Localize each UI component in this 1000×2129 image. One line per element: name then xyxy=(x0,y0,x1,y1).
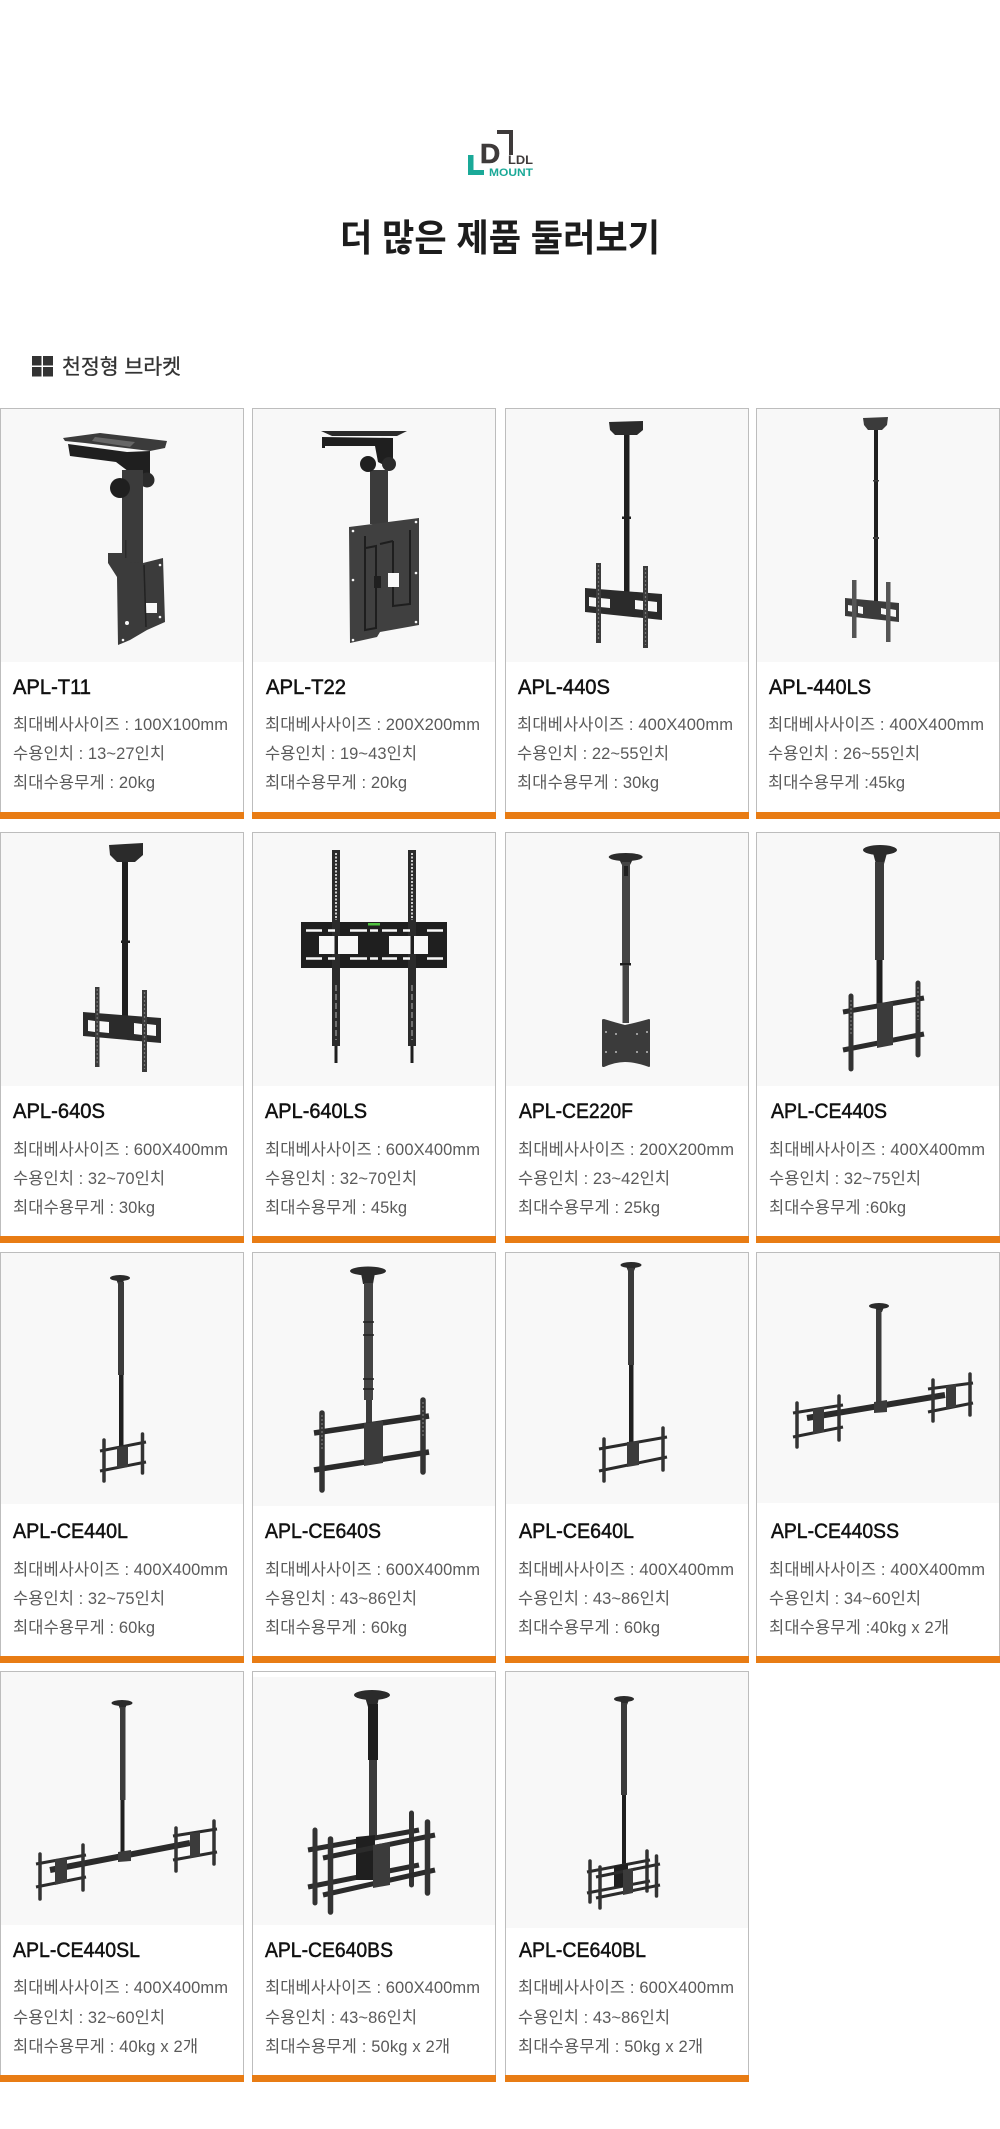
specs: 최대수용무게 : 20kg xyxy=(265,773,407,792)
panel: APL-CE640L xyxy=(505,1252,749,1663)
specs: 최대베사사이즈 : 400X400mm xyxy=(769,1140,985,1159)
specs xyxy=(13,715,228,792)
model name: APL-440LS xyxy=(769,676,871,699)
specs: 수용인치 : 34~60인치 xyxy=(769,1589,921,1608)
specs: 최대수용무게 : 20kg xyxy=(13,773,155,792)
specs: 수용인치 : 32~60인치 xyxy=(13,2008,165,2027)
specs: 최대베사사이즈 : 400X400mm xyxy=(13,1560,228,1579)
model name: APL-CE220F xyxy=(519,1100,633,1123)
specs: 최대수용무게 : 50kg x 2개 xyxy=(265,2037,450,2056)
model name: APL-CE640BS xyxy=(265,1939,393,1962)
specs: 수용인치 : 43~86인치 xyxy=(518,1589,670,1608)
specs xyxy=(768,715,984,792)
specs xyxy=(265,1560,480,1637)
bracket image: APL-T22 xyxy=(321,431,419,643)
specs: 수용인치 : 22~55인치 xyxy=(517,744,669,763)
specs: 최대베사사이즈 : 400X400mm xyxy=(13,1978,228,1997)
specs xyxy=(769,1140,985,1217)
specs: 수용인치 : 23~42인치 xyxy=(518,1169,670,1188)
model name: APL-T22 xyxy=(266,676,346,699)
bracket image: APL-640S xyxy=(83,843,161,1072)
panel: APL-CE640BL xyxy=(505,1672,749,2082)
bracket image: APL-CE440S xyxy=(843,845,924,1069)
model name: APL-640LS xyxy=(265,1100,367,1123)
specs: 수용인치 : 26~55인치 xyxy=(768,744,920,763)
specs: 최대수용무게 : 30kg xyxy=(13,1198,155,1217)
specs: 최대베사사이즈 : 400X400mm xyxy=(769,1560,985,1579)
specs: 최대수용무게 : 60kg xyxy=(265,1618,407,1637)
specs: 수용인치 : 32~70인치 xyxy=(265,1169,417,1188)
panel: APL-CE220F xyxy=(505,832,749,1243)
model name: APL-CE640S xyxy=(265,1520,381,1543)
panel: APL-CE640BS xyxy=(252,1672,496,2082)
bracket image: APL-CE440SS xyxy=(793,1303,973,1447)
model name: APL-CE440SS xyxy=(771,1520,899,1543)
specs: 최대베사사이즈 : 600X400mm xyxy=(265,1978,480,1997)
specs xyxy=(518,1560,734,1637)
specs: 최대수용무게 :40kg x 2개 xyxy=(769,1618,949,1637)
model name: APL-CE640BL xyxy=(519,1939,646,1962)
specs: 최대베사사이즈 : 100X100mm xyxy=(13,715,228,734)
specs: 최대베사사이즈 : 600X400mm xyxy=(265,1140,480,1159)
title: 더 많은 제품 둘러보기 xyxy=(340,217,660,259)
specs xyxy=(13,1560,228,1637)
bracket image: APL-440S xyxy=(585,421,662,648)
specs: 최대수용무게 : 45kg xyxy=(265,1198,407,1217)
bracket image: APL-CE640S xyxy=(314,1266,429,1490)
panel: APL-CE440SS xyxy=(756,1252,1000,1663)
model name: APL-T11 xyxy=(13,676,91,699)
bracket image: APL-CE440SL xyxy=(36,1700,217,1899)
logo: LDL Mount: LDL xyxy=(508,155,533,167)
bracket image: APL-CE640BL xyxy=(587,1696,660,1908)
bracket image: APL-CE640L xyxy=(599,1262,667,1481)
panel: APL-T11 xyxy=(0,408,244,819)
panel: APL-T22 xyxy=(252,408,496,819)
panel: APL-440S xyxy=(505,408,749,819)
model name: APL-440S xyxy=(518,676,610,699)
specs: 최대베사사이즈 : 600X400mm xyxy=(518,1978,734,1997)
specs: 최대베사사이즈 : 600X400mm xyxy=(265,1560,480,1579)
specs xyxy=(518,1140,734,1217)
specs xyxy=(265,1978,480,2056)
specs: 최대수용무게 : 25kg xyxy=(518,1198,660,1217)
logo: LDL Mount xyxy=(468,130,533,179)
specs: 수용인치 : 19~43인치 xyxy=(265,744,417,763)
specs: 최대수용무게 : 60kg xyxy=(13,1618,155,1637)
specs: 최대베사사이즈 : 400X400mm xyxy=(518,1560,734,1579)
panel: APL-CE640S xyxy=(252,1252,496,1663)
specs: 최대수용무게 : 40kg x 2개 xyxy=(13,2037,198,2056)
panel: APL-440LS xyxy=(756,408,1000,819)
model name: APL-CE440SL xyxy=(13,1939,140,1962)
specs: 최대수용무게 : 60kg xyxy=(518,1618,660,1637)
specs: 최대베사사이즈 : 600X400mm xyxy=(13,1140,228,1159)
specs: 최대수용무게 :45kg xyxy=(768,773,905,792)
model name: APL-640S xyxy=(13,1100,105,1123)
specs: 최대수용무게 : 50kg x 2개 xyxy=(518,2037,703,2056)
model name: APL-CE440S xyxy=(771,1100,887,1123)
logo: LDL Mount: D xyxy=(480,138,500,169)
model name: APL-CE440L xyxy=(13,1520,128,1543)
specs: 최대수용무게 : 30kg xyxy=(517,773,659,792)
specs: 최대수용무게 :60kg xyxy=(769,1198,906,1217)
specs: 수용인치 : 43~86인치 xyxy=(265,2008,417,2027)
specs: 수용인치 : 32~75인치 xyxy=(13,1589,165,1608)
bracket image: APL-640LS xyxy=(301,850,447,1063)
panel: APL-CE440S xyxy=(756,832,1000,1243)
logo: LDL Mount: MOUNT xyxy=(489,167,533,179)
specs: 최대베사사이즈 : 400X400mm xyxy=(517,715,733,734)
specs xyxy=(13,1978,228,2056)
panel: APL-640S xyxy=(0,832,244,1243)
specs: 수용인치 : 13~27인치 xyxy=(13,744,165,763)
specs: 수용인치 : 43~86인치 xyxy=(265,1589,417,1608)
section heading: ceiling brackets: 천정형 브라켓 xyxy=(62,356,181,379)
specs xyxy=(13,1140,228,1217)
specs xyxy=(265,1140,480,1217)
panel: APL-CE440SL xyxy=(0,1672,244,2082)
specs: 수용인치 : 32~75인치 xyxy=(769,1169,921,1188)
specs: 최대베사사이즈 : 200X200mm xyxy=(265,715,480,734)
bracket image: APL-CE220F xyxy=(602,853,650,1067)
specs: 최대베사사이즈 : 400X400mm xyxy=(768,715,984,734)
panel: APL-CE440L xyxy=(0,1252,244,1663)
specs xyxy=(517,715,733,792)
specs: 수용인치 : 43~86인치 xyxy=(518,2008,670,2027)
bracket image: APL-CE640BS xyxy=(308,1690,435,1912)
bracket image: APL-440LS xyxy=(845,417,899,642)
specs xyxy=(265,715,480,792)
bracket image: APL-T11 xyxy=(63,433,167,645)
model name: APL-CE640L xyxy=(519,1520,634,1543)
panel: APL-640LS xyxy=(252,832,496,1243)
specs: 수용인치 : 32~70인치 xyxy=(13,1169,165,1188)
specs: 최대베사사이즈 : 200X200mm xyxy=(518,1140,734,1159)
bracket image: APL-CE440L xyxy=(100,1275,146,1481)
specs xyxy=(769,1560,985,1637)
specs xyxy=(518,1978,734,2056)
